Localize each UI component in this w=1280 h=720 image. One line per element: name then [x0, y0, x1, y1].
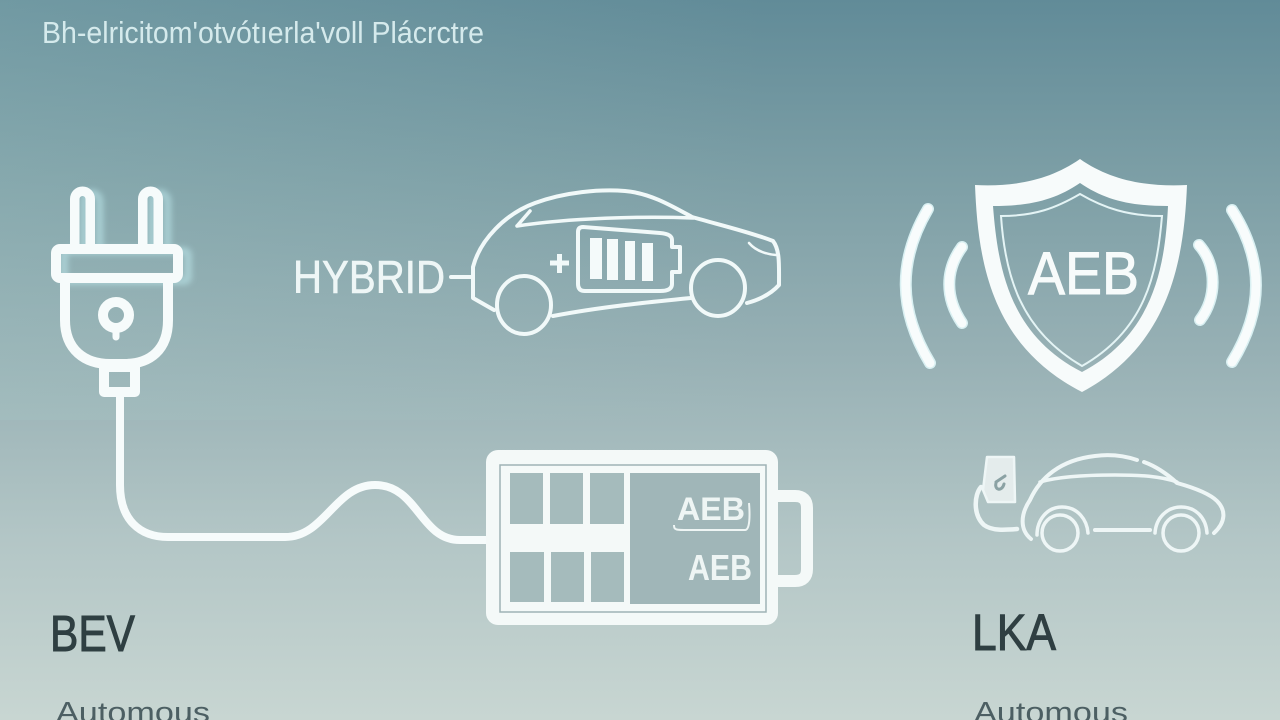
icon: small car charging — [976, 455, 1223, 551]
right waves — [1199, 210, 1256, 362]
icon: signal waves — [906, 209, 1256, 363]
car battery — [578, 227, 680, 291]
headlight — [749, 243, 776, 255]
car window — [517, 211, 693, 226]
small car front wheel — [1155, 507, 1207, 551]
rear wheel — [497, 276, 551, 334]
left waves — [906, 209, 962, 363]
small car body — [1023, 455, 1223, 539]
plug socket mark — [103, 302, 129, 337]
battery label one: AEB — [677, 491, 745, 527]
plug flange — [56, 249, 178, 278]
shield text: AEB — [1028, 240, 1139, 307]
icon: AEB shield — [975, 159, 1187, 392]
car body outline — [473, 190, 779, 316]
heading: BEV: BEV — [50, 605, 135, 662]
charger mark — [996, 476, 1005, 489]
plug body — [65, 283, 168, 364]
plus sign — [550, 254, 569, 273]
cable — [120, 396, 488, 540]
charging cable — [976, 487, 1017, 530]
battery cells — [510, 473, 624, 602]
battery label two: AEB — [688, 547, 752, 588]
battery casing — [486, 450, 778, 625]
connector dash — [451, 275, 473, 279]
shield inner line — [1001, 194, 1162, 366]
battery bars — [590, 238, 653, 281]
label: hybrid: HYBRID — [293, 251, 445, 303]
plug glow — [64, 193, 188, 281]
battery window — [630, 473, 760, 604]
icon: large battery — [486, 450, 807, 625]
front wheel — [691, 260, 745, 316]
small car rear wheel — [1037, 507, 1088, 551]
icon: hybrid car — [451, 190, 779, 334]
charger — [983, 457, 1015, 502]
small car roof line — [1040, 475, 1177, 482]
plug neck — [104, 367, 135, 392]
wave outlines — [906, 209, 1256, 363]
battery terminal — [776, 496, 807, 581]
shield frame — [975, 159, 1187, 392]
plug prongs — [75, 191, 158, 245]
title: Bh-elricitom'otvótıerla'voll Plácrctre — [42, 15, 484, 50]
heading: LKA: LKA — [972, 604, 1056, 661]
icon: plug with cable — [56, 191, 488, 540]
